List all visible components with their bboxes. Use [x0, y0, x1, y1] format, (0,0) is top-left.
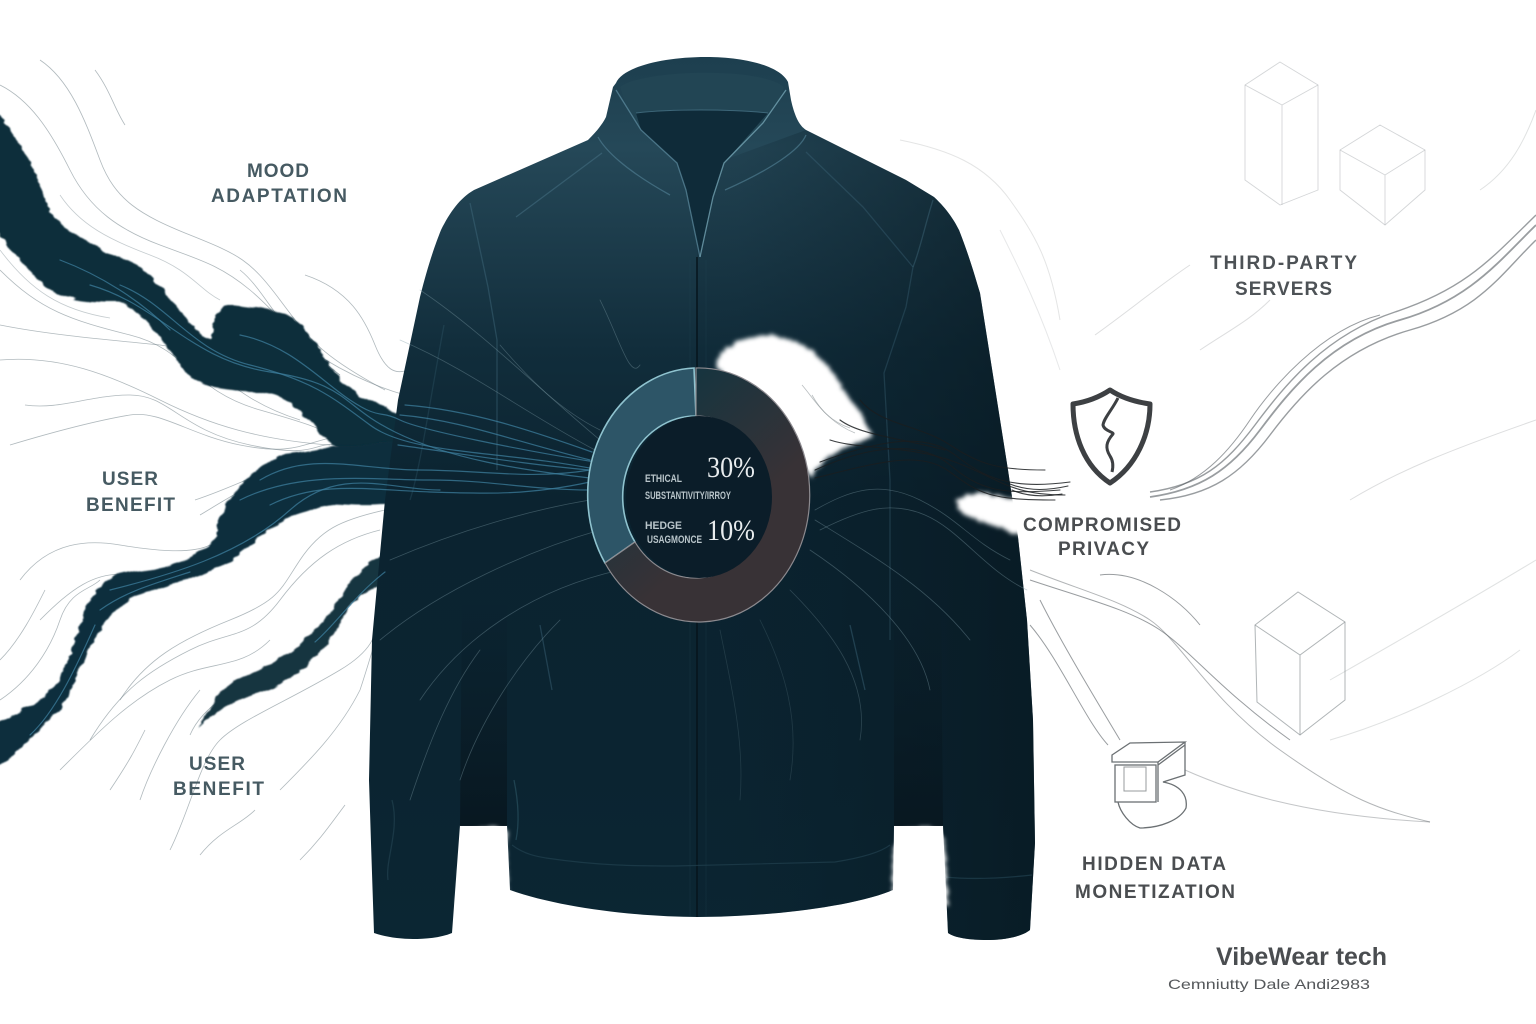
jacket right shading	[697, 130, 1035, 940]
label: user benefit (lower): BENEFIT	[173, 779, 264, 800]
wisps inside upper cloud	[802, 385, 855, 433]
icon: cracked shield	[1073, 390, 1150, 483]
donut value: 10%: 10%	[707, 514, 755, 547]
label: user benefit (lower): USER	[189, 754, 245, 775]
label: compromised privacy: COMPROMISED	[1023, 515, 1181, 536]
label: third-party servers: SERVERS	[1235, 279, 1332, 300]
ribbon: lower hair flow	[198, 548, 395, 728]
jacket silhouette	[369, 57, 1035, 940]
white notch below right sleeve	[893, 826, 948, 905]
donut segment: dark	[605, 368, 810, 622]
label: hidden data monetization: MONETIZATION	[1075, 882, 1235, 903]
label: user benefit (middle): BENEFIT	[86, 495, 175, 516]
ribbon: upper hair flow	[0, 108, 420, 458]
donut value: 30%: 30%	[707, 451, 755, 484]
icon: sketch cubes, top right	[1245, 62, 1425, 225]
ribbon: middle hair flow	[0, 440, 420, 770]
label: mood adaptation: MOOD	[247, 161, 309, 182]
thin flow lines: left side	[0, 60, 408, 860]
label: third-party servers: THIRD-PARTY	[1210, 253, 1357, 274]
donut centre	[626, 416, 772, 578]
collar seams, raglan seams and zipper	[388, 90, 1032, 917]
icon: sketch server box, lower right	[1255, 592, 1345, 735]
white cloud: side burst	[956, 493, 1050, 565]
label: user benefit (middle): USER	[102, 469, 158, 490]
brand name: VibeWear tech	[1216, 943, 1387, 971]
label: mood adaptation: ADAPTATION	[211, 186, 347, 207]
donut segment: blue	[588, 368, 696, 563]
footer note: Cemniutty Dale Andi2983	[1168, 976, 1370, 992]
donut label: first: ETHICAL	[645, 473, 682, 485]
donut label: second: USAGMONCE	[647, 534, 702, 546]
fibres inside jacket and ribbons: blue flow	[30, 260, 1027, 800]
collar inner shadow	[636, 110, 768, 257]
donut chart	[588, 368, 810, 622]
label: compromised privacy: PRIVACY	[1058, 539, 1149, 560]
donut label: first: SUBSTANTIVITY/IRROY	[645, 490, 731, 502]
label: hidden data monetization: HIDDEN DATA	[1082, 854, 1226, 875]
donut label: second: HEDGE	[645, 520, 682, 532]
thin flow lines: right side	[900, 110, 1536, 822]
sleeve gap shadows	[460, 600, 943, 826]
jacket	[369, 57, 1035, 940]
collar inner back	[620, 73, 784, 257]
icon: hidden data box	[1112, 742, 1186, 828]
dark strands across right side	[815, 400, 1070, 500]
white notch below left sleeve	[458, 826, 507, 905]
white cloud: upper burst	[716, 335, 872, 478]
